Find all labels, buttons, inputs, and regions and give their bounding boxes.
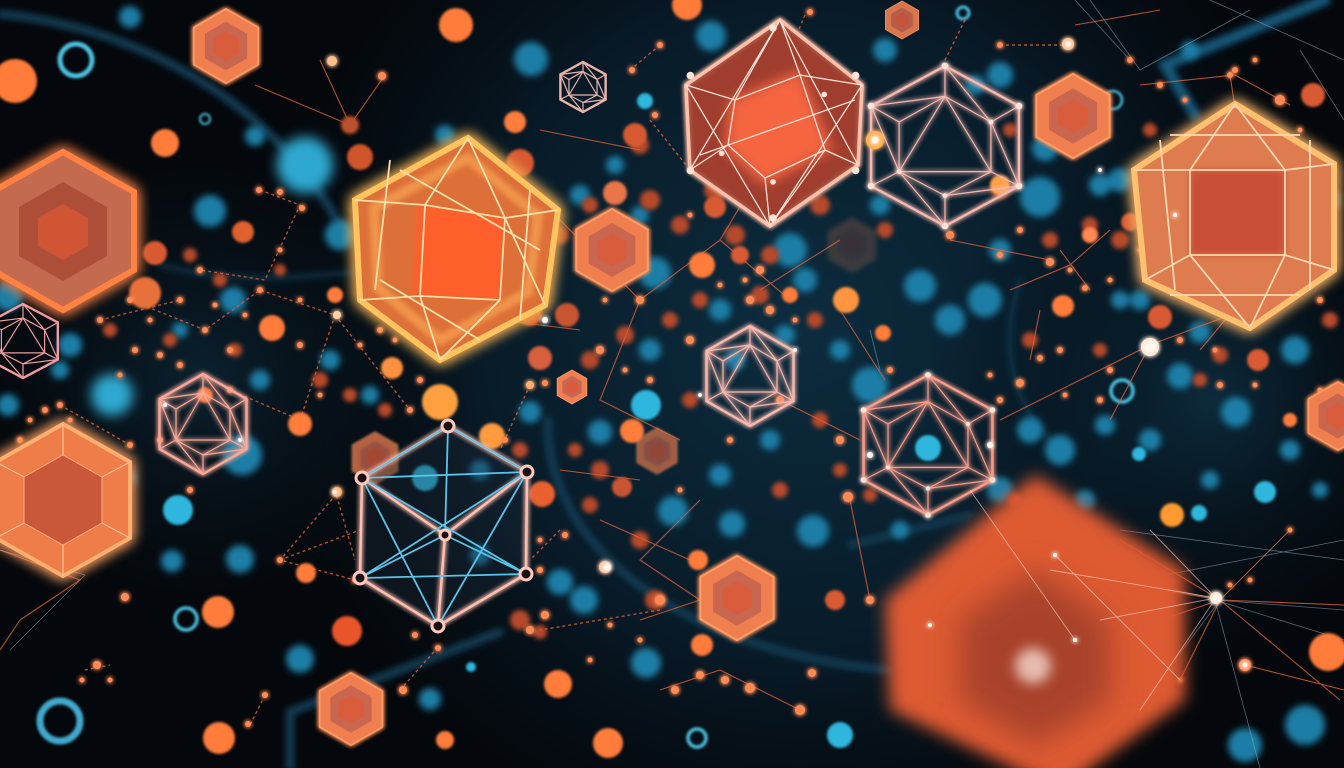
wire polyhedron left edge [0,304,58,378]
wire polyhedron centre [706,326,794,426]
sparkles [163,42,1248,668]
large soft blue glows [91,137,333,416]
hexagon right edge [1308,382,1344,450]
small hexagon top centre [885,1,919,39]
dim orange background dots [103,117,1338,639]
wire polyhedron upper right [866,63,1022,229]
faded hexagon left centre [352,432,398,484]
tiny hexagon centre [557,370,587,404]
large yellow wire polyhedron right [1134,104,1334,328]
small hexagon top left [194,9,258,83]
small wire polyhedron top [560,62,606,112]
faded hexagon centre [637,428,677,474]
hexagon bottom centre [700,556,774,640]
wire polyhedron centre right [861,372,995,518]
blue ring markers [40,7,1133,747]
wire polyhedron left [160,374,246,474]
wire polyhedron top centre [686,20,862,226]
large hexagon left [0,152,134,310]
hexagon upper middle [576,209,648,291]
hexagon bottom left [320,673,382,745]
bright blue dots [52,93,1276,748]
hexagon top right [1036,74,1110,158]
large blurred foreground hexagon [885,475,1185,768]
large yellow wire polyhedron [355,138,558,360]
lines over foreground hexagon [970,490,1216,710]
large bright hexagon lower left [0,424,130,576]
large blue wire polyhedron [354,420,533,632]
faded hexagon upper [829,218,875,272]
